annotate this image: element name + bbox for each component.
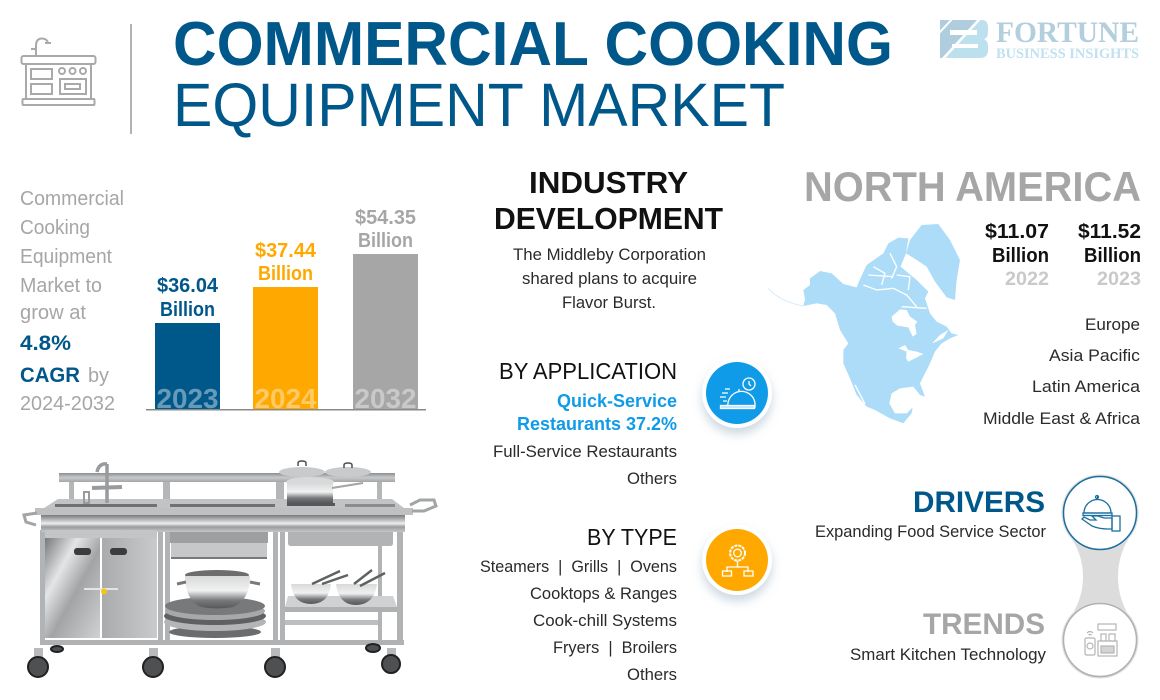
- cabinet doors: [45, 530, 157, 638]
- values: 2023: [1078, 221, 1141, 290]
- values: 2023: 2023: [1097, 269, 1141, 290]
- text block: drivers: [815, 486, 1046, 541]
- logo: Fortune Business Insights: [940, 16, 1139, 62]
- list: other regions: Europe: [1085, 315, 1140, 334]
- values: 2023: $11.52: [1078, 221, 1141, 243]
- section: by application: Full-Service Restaurants: [493, 442, 677, 461]
- list: other regions: Latin America: [1032, 377, 1141, 396]
- divider line: [130, 24, 132, 134]
- map: North America: [768, 224, 960, 423]
- text block: CAGR statement: 2024-2032: [20, 393, 115, 415]
- logo: Fortune Business Insights: BUSINESS INSIGHTS: [996, 46, 1139, 62]
- icon: kitchen unit: [22, 38, 96, 105]
- text block: trends: TRENDS: [923, 608, 1045, 641]
- text block: trends: Smart Kitchen Technology: [850, 645, 1046, 664]
- section: by type: Fryers | Broilers: [553, 638, 677, 657]
- list: other regions: Middle East & Africa: [983, 409, 1141, 428]
- logo: Fortune Business Insights: FORTUNE: [996, 16, 1139, 49]
- values: 2022: $11.07: [985, 221, 1049, 243]
- section: by application: Restaurants 37.2%: [517, 414, 677, 434]
- bar: 2023: [155, 275, 220, 414]
- section: by application: Quick-Service: [557, 391, 677, 411]
- casters: [28, 644, 400, 677]
- saucepan: [286, 477, 363, 506]
- bar: 2032: Billion: [358, 230, 413, 252]
- title: COMMERCIAL COOKING: [173, 10, 893, 79]
- text block: industry development detail: The Middleby Corporation: [513, 245, 706, 264]
- title: EQUIPMENT MARKET: [173, 71, 785, 139]
- bar: 2024: [253, 240, 318, 414]
- bar chart: market size: [146, 207, 426, 414]
- basket drawer: [170, 532, 268, 559]
- illustration: stainless steel kitchen cart: [24, 461, 436, 677]
- section: by type: [480, 524, 677, 684]
- handles: [24, 513, 37, 525]
- bar: 2032: 2032: [354, 383, 416, 414]
- section: by type: Others: [627, 665, 677, 684]
- faucet: [84, 464, 122, 503]
- values: 2022: Billion: [992, 245, 1049, 267]
- bar: 2023: $36.04: [157, 275, 219, 297]
- text block: CAGR statement: by: [88, 365, 109, 387]
- text block: CAGR statement: Commercial: [20, 188, 124, 210]
- values: 2023: Billion: [1084, 245, 1141, 267]
- text block: trends: [850, 608, 1046, 664]
- steel drawer: [288, 532, 393, 546]
- section: by type: Cook-chill Systems: [533, 611, 677, 630]
- bar: 2024: 2024: [254, 383, 317, 414]
- heading: industry development: DEVELOPMENT: [494, 201, 723, 236]
- text block: CAGR statement: CAGR: [20, 364, 80, 387]
- pans on shelf: [279, 461, 371, 477]
- text block: industry development detail: Flavor Burst.: [562, 293, 656, 312]
- bar: 2023: Billion: [160, 299, 215, 321]
- text block: CAGR statement: grow at: [20, 302, 86, 324]
- sink deck: [44, 499, 404, 508]
- text block: drivers: Expanding Food Service Sector: [815, 522, 1046, 541]
- heading: industry development: [494, 165, 723, 236]
- plates and pot: [164, 570, 266, 638]
- text block: drivers: DRIVERS: [913, 486, 1045, 519]
- upper shelf: [59, 473, 395, 482]
- values: 2022: 2022: [1005, 269, 1049, 290]
- bar: 2024: $37.44: [255, 240, 317, 262]
- bar: 2023: 2023: [156, 383, 218, 414]
- icon: serving hand: [1062, 474, 1138, 552]
- bar: 2032: [353, 207, 418, 414]
- top rail: [35, 508, 413, 515]
- icon: cloche with clock: [702, 358, 772, 428]
- connector: drivers to trends capsule: [1068, 533, 1132, 621]
- section: by application: BY APPLICATION: [499, 358, 677, 384]
- list: other regions: Asia Pacific: [1049, 346, 1141, 365]
- icon: smart kitchen: [1062, 602, 1138, 678]
- heading: industry development: INDUSTRY: [529, 165, 688, 200]
- heading: North America: NORTH AMERICA: [804, 163, 1141, 210]
- section: by application: Others: [627, 469, 677, 488]
- list: other regions: [983, 315, 1141, 428]
- text block: industry development detail: [513, 245, 706, 312]
- bar: 2032: $54.35: [355, 207, 416, 229]
- text block: industry development detail: shared plans to acquire: [522, 269, 697, 288]
- text block: CAGR statement: 4.8%: [20, 332, 71, 355]
- section: by type: BY TYPE: [587, 524, 677, 550]
- bar: 2024: Billion: [258, 263, 313, 285]
- lower right shelf with bowls: [285, 570, 397, 625]
- section: by type: Steamers | Grills | Ovens: [480, 557, 677, 576]
- text block: CAGR statement: Equipment: [20, 246, 112, 268]
- bottom rail: [40, 640, 404, 645]
- text block: CAGR statement: [20, 188, 124, 415]
- title: [173, 10, 893, 139]
- text block: CAGR statement: Market to: [20, 275, 102, 297]
- section: by application: [493, 358, 677, 488]
- section: by type: Cooktops & Ranges: [530, 584, 677, 603]
- values: 2022: [985, 221, 1049, 290]
- text block: CAGR statement: Cooking: [20, 217, 90, 239]
- legs: [40, 530, 403, 645]
- icon: gear hierarchy: [702, 525, 772, 595]
